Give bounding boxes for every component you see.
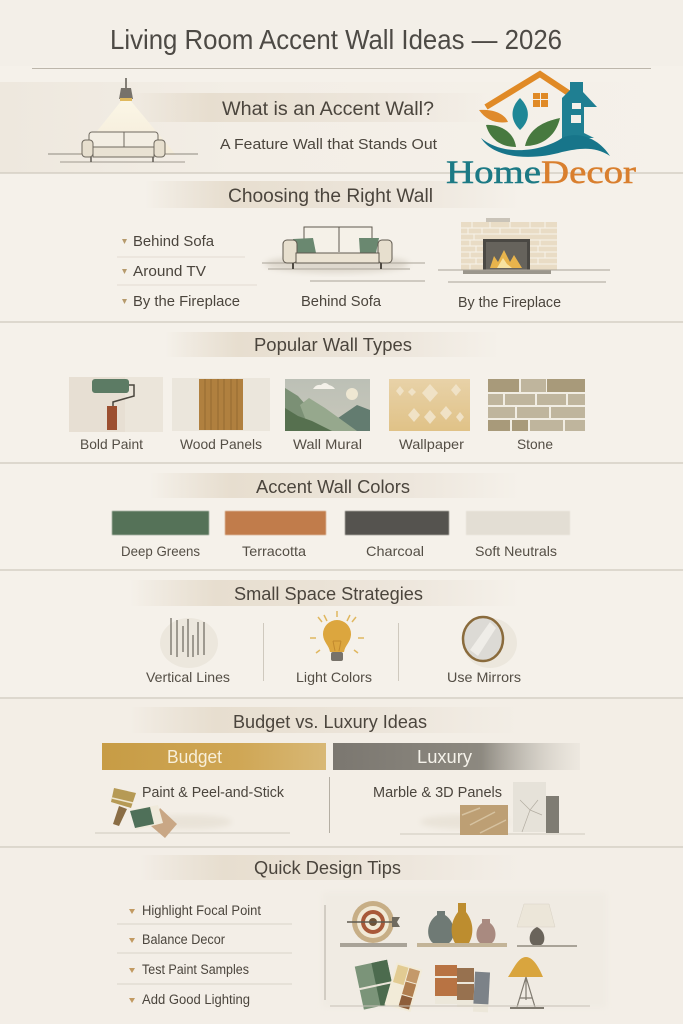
- heading: what is an accent wall: [130, 93, 490, 122]
- item: vertical lines: [146, 618, 230, 685]
- item: use mirrors: [447, 617, 521, 685]
- panel: quick design tips: [117, 855, 590, 1012]
- item: light colors: Light Colors: [296, 669, 372, 685]
- tile: wallpaper: [389, 379, 470, 452]
- list: tips: [117, 903, 292, 1007]
- icon: stone fireplace: [438, 218, 610, 282]
- panel: popular wall types: [69, 332, 585, 452]
- list: tips: Balance Decor: [142, 932, 225, 947]
- banner: luxury: [333, 743, 580, 770]
- caption: behind sofa: Behind Sofa: [301, 294, 382, 310]
- tile: wall mural: [285, 379, 370, 452]
- banner: budget: [102, 743, 326, 770]
- tile: stone: [488, 379, 585, 452]
- caption: by the fireplace: By the Fireplace: [458, 295, 561, 311]
- swatch: deep greens: [112, 511, 209, 559]
- label: Wall Mural: [293, 436, 362, 452]
- icon: pendant lamp over sofa: [48, 78, 198, 162]
- item: vertical lines: Vertical Lines: [146, 669, 230, 685]
- list: wall locations: [117, 234, 257, 310]
- panel: accent wall colors: [112, 473, 570, 559]
- heading: choosing the right wall: Choosing the Right Wall: [228, 186, 433, 207]
- tile: wood panels: [172, 378, 270, 452]
- title: Living Room Accent Wall Ideas — 2026: [110, 24, 562, 55]
- item: marble and 3d panels: Marble & 3D Panels: [373, 785, 502, 801]
- heading: quick design tips: [140, 855, 520, 880]
- swatch: terracotta: [225, 511, 326, 559]
- heading: choosing the right wall: [145, 181, 520, 208]
- icon: vases on shelf: [417, 903, 507, 947]
- list: tips: Highlight Focal Point: [142, 903, 261, 918]
- logo wordmark: [446, 155, 636, 191]
- panel: choosing the right wall: [117, 181, 610, 311]
- swatch: charcoal: Charcoal: [366, 543, 424, 559]
- heading: budget vs luxury ideas: [130, 707, 520, 733]
- item: marble and 3d panels: [373, 782, 585, 835]
- panel: small space strategies: [130, 580, 521, 685]
- label: Stone: [517, 436, 553, 452]
- heading: quick design tips: Quick Design Tips: [254, 858, 401, 878]
- swatch: soft neutrals: [466, 511, 570, 559]
- banner: budget: Budget: [167, 747, 222, 767]
- icon: target on shelf: [340, 901, 407, 947]
- heading: what is an accent wall: What is an Accent Wall?: [222, 99, 434, 120]
- icon: yellow tripod lamp: [330, 957, 590, 1009]
- heading: accent wall colors: [150, 473, 520, 498]
- heading: small space strategies: Small Space Strategies: [234, 584, 423, 604]
- logo: HomeDecor: [446, 74, 636, 191]
- swatch: deep greens: Deep Greens: [121, 543, 200, 559]
- heading: popular wall types: [165, 332, 500, 357]
- logo wordmark: Decor: [541, 155, 636, 191]
- label: Wood Panels: [180, 436, 262, 452]
- heading: budget vs luxury ideas: Budget vs. Luxury Ideas: [233, 712, 427, 732]
- item: light colors: [296, 611, 372, 685]
- icon: table lamp on shelf: [517, 904, 577, 947]
- tile: bold paint: [69, 377, 163, 452]
- list: tips: Add Good Lighting: [142, 992, 250, 1007]
- label: Bold Paint: [80, 436, 143, 452]
- label: Wallpaper: [399, 436, 464, 452]
- heading: small space strategies: [130, 580, 520, 606]
- swatch: charcoal: [345, 511, 449, 559]
- swatch: terracotta: Terracotta: [242, 543, 306, 559]
- item: paint and peel-and-stick: Paint & Peel-and-Stick: [142, 785, 285, 801]
- panel: what is an accent wall: [48, 78, 490, 162]
- text: definition: A Feature Wall that Stands Out: [220, 137, 437, 153]
- list: wall locations: Behind Sofa: [133, 234, 215, 250]
- icon: paint sample fans: [355, 960, 423, 1012]
- list: tips: Test Paint Samples: [142, 962, 249, 977]
- heading: accent wall colors: Accent Wall Colors: [256, 477, 410, 497]
- list: wall locations: Around TV: [133, 264, 206, 280]
- list: wall locations: By the Fireplace: [133, 294, 240, 310]
- panel: budget vs luxury: [95, 707, 585, 838]
- logo mark: house and leaves: [479, 74, 610, 157]
- heading: popular wall types: Popular Wall Types: [254, 335, 412, 355]
- item: paint and peel-and-stick: [95, 785, 290, 838]
- swatch: soft neutrals: Soft Neutrals: [475, 543, 557, 559]
- banner: luxury: Luxury: [417, 747, 472, 767]
- logo wordmark: Home: [446, 155, 541, 191]
- icon: swatch cards: [435, 965, 490, 1012]
- item: use mirrors: Use Mirrors: [447, 669, 521, 685]
- icon: sofa with green cushions: [262, 227, 425, 281]
